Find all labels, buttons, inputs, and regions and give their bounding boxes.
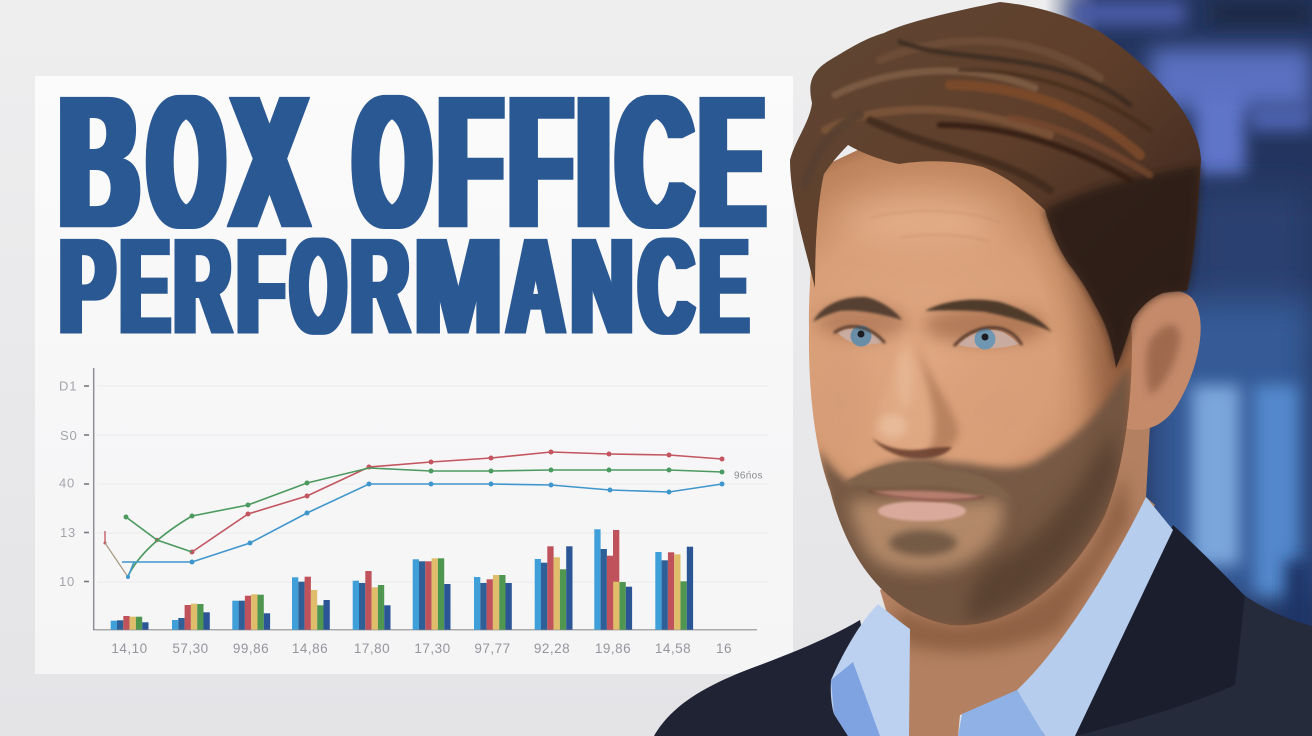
- beard darker jaw: [967, 430, 1118, 622]
- title line 1: BOX OFFICE: F: [439, 57, 502, 267]
- hair: highlights: [805, 41, 1150, 190]
- shirt collar: left: [831, 604, 910, 736]
- title line 1: BOX OFFICE: I: [576, 57, 611, 267]
- person portrait: [654, 2, 1312, 736]
- upper lip: [872, 491, 982, 502]
- y-axis labels: S0: [60, 428, 78, 443]
- title line 1: BOX OFFICE: C: [617, 57, 692, 267]
- y-axis labels: [59, 378, 78, 589]
- title line 2: PERFORMANCE: R: [351, 210, 408, 362]
- mustache: [846, 462, 998, 488]
- shadow under beard on neck: [895, 470, 1130, 652]
- x-axis labels: 17,30: [414, 641, 451, 656]
- x-axis labels: 14,10: [111, 641, 148, 656]
- left cheek warmth: [930, 350, 1080, 470]
- x-axis labels: 17,80: [354, 641, 390, 656]
- face: [808, 150, 1132, 626]
- title line 2: PERFORMANCE: O: [291, 210, 346, 362]
- title line 1: BOX OFFICE: F: [510, 57, 571, 267]
- x-axis labels: [111, 641, 732, 656]
- forehead highlight: [848, 192, 991, 240]
- series end label: 96ńos: [734, 470, 763, 482]
- forehead creases: [870, 211, 1000, 242]
- x-axis labels: 16: [716, 641, 732, 656]
- line series: red: [104, 450, 724, 554]
- title line 1: BOX OFFICE: X: [233, 57, 306, 267]
- shirt collar: right: [1017, 497, 1173, 736]
- title line 2: PERFORMANCE: E: [700, 210, 748, 362]
- ear: [1122, 291, 1201, 430]
- lower lip: [878, 501, 966, 521]
- beard: [818, 365, 1129, 627]
- line series: blue: [122, 482, 724, 579]
- x-axis labels: 97,77: [474, 641, 511, 656]
- x-axis labels: 99,86: [233, 641, 269, 656]
- title line 2: PERFORMANCE: A: [508, 210, 564, 362]
- title line 2: PERFORMANCE: M: [415, 210, 502, 362]
- sparse beard around the mouth: [850, 498, 1003, 572]
- eye socket shadows: [816, 305, 908, 339]
- eyebrow: left: [813, 297, 902, 322]
- y-axis labels: 40: [59, 476, 75, 490]
- y-axis labels: 10: [59, 574, 75, 589]
- shirt placket: [958, 690, 1045, 736]
- line series: green: [105, 468, 724, 577]
- title line 1: BOX OFFICE: O: [149, 57, 224, 267]
- x-axis labels: 92,28: [534, 641, 570, 656]
- x-axis labels: 14,58: [655, 641, 691, 656]
- x-axis labels: 19,86: [595, 641, 631, 656]
- title line 2: PERFORMANCE: R: [174, 210, 230, 362]
- eyebrow: right: [925, 300, 1052, 332]
- nose: [872, 350, 960, 460]
- title line 2: PERFORMANCE: P: [60, 210, 114, 362]
- title line 2: PERFORMANCE: E: [121, 210, 169, 362]
- x-axis labels: 57,30: [172, 641, 209, 656]
- combined line and bar chart: [59, 368, 768, 656]
- title line 2: PERFORMANCE: C: [639, 210, 693, 362]
- title line 1: BOX OFFICE: E: [700, 57, 764, 267]
- gridlines: [97, 386, 768, 582]
- title: [60, 57, 763, 362]
- blurred studio backdrop: [1045, 0, 1312, 736]
- title line 2: PERFORMANCE: F: [237, 210, 284, 362]
- title line 1: BOX OFFICE: O: [354, 57, 430, 267]
- jacket: [654, 505, 1312, 736]
- axes: [84, 368, 757, 630]
- eye: left: [834, 326, 885, 346]
- panel: chart card: [35, 76, 793, 674]
- temple shadow: [1036, 202, 1132, 456]
- eye: right: [954, 328, 1022, 350]
- bars: [111, 529, 693, 630]
- title line 2: PERFORMANCE: N: [571, 210, 633, 362]
- hair: [790, 2, 1201, 368]
- x-axis labels: 14,86: [292, 641, 328, 656]
- title line 1: BOX OFFICE: B: [60, 57, 138, 267]
- neck: [880, 425, 1155, 736]
- mouth line: [868, 491, 984, 500]
- y-axis labels: D1: [59, 378, 77, 394]
- soul patch: [889, 530, 957, 556]
- hair: dark side fade: [1045, 165, 1200, 368]
- y-axis labels: 13: [60, 525, 76, 540]
